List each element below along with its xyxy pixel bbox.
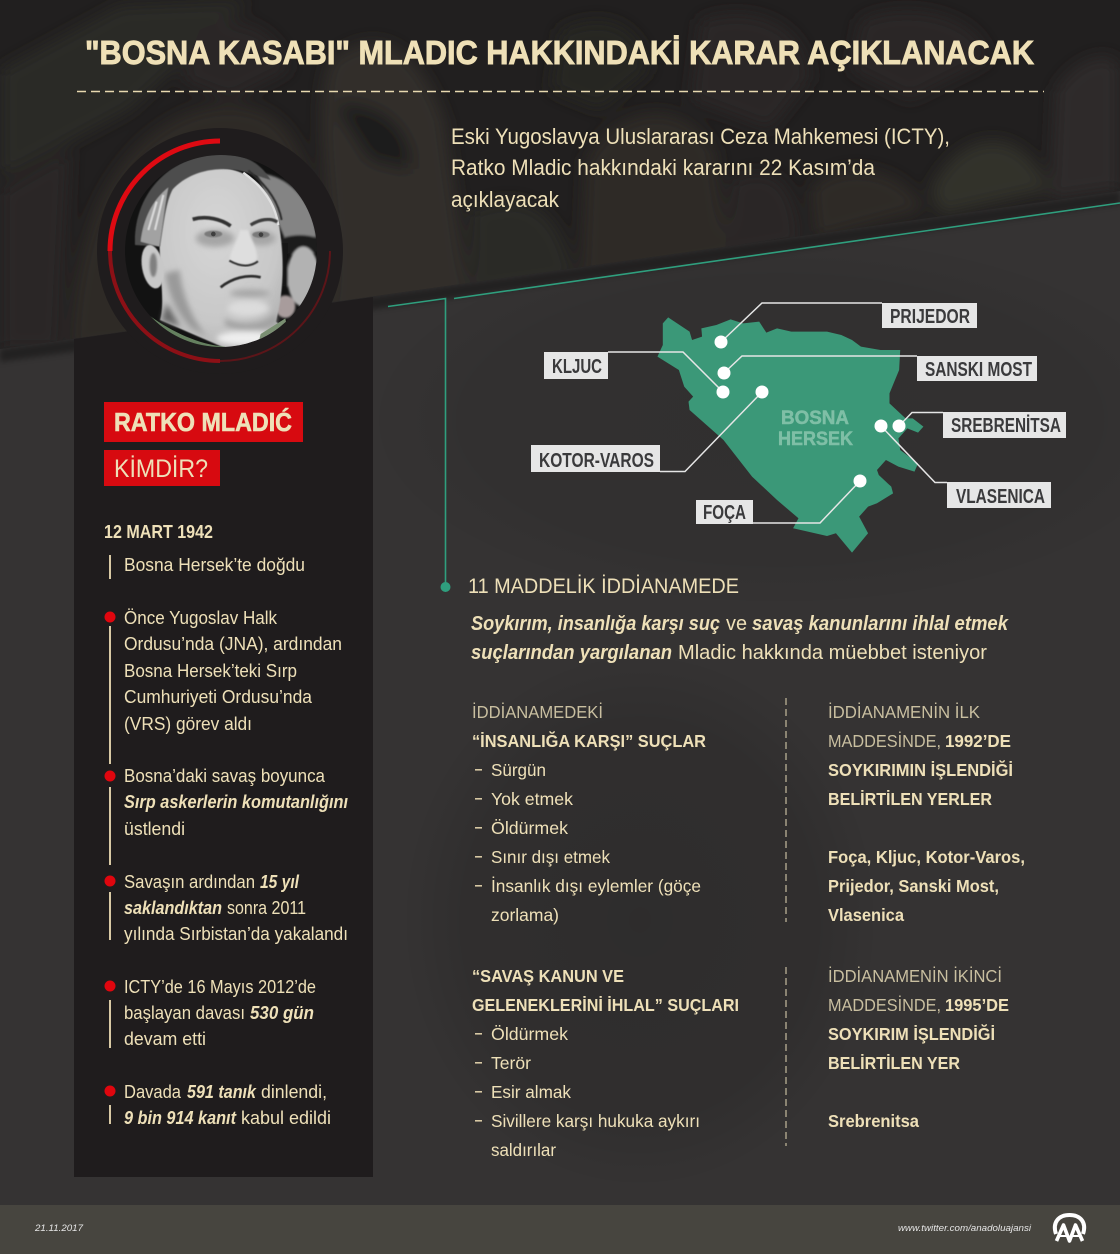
label: Sanski Most: SANSKI MOST bbox=[925, 359, 1032, 381]
intro text: Ratko Mladic hakkındaki kararını 22 Kasım’da bbox=[451, 155, 876, 180]
label: Prijedor: PRIJEDOR bbox=[890, 306, 970, 328]
map shape bbox=[657, 317, 923, 553]
entry: witnesses bbox=[104, 1082, 331, 1128]
column: crimes against humanity: zorlama) bbox=[491, 905, 559, 925]
indictment summary: savaş kanunlarını ihlal etmek bbox=[752, 613, 1009, 635]
location dots bbox=[714, 336, 906, 488]
indictment summary bbox=[471, 613, 1009, 664]
label: Vlasenica bbox=[947, 482, 1051, 508]
entry: trial bbox=[104, 977, 316, 1049]
map name: BOSNA bbox=[781, 408, 849, 429]
label: Foca: FOÇA bbox=[703, 502, 746, 524]
column: war crimes: Öldürmek bbox=[491, 1024, 568, 1044]
teal connector line bbox=[388, 203, 1120, 592]
entry: hiding: saklandıktan bbox=[124, 898, 222, 918]
date: 21.11.2017 bbox=[34, 1223, 84, 1234]
column: war crimes: “SAVAŞ KANUN VE bbox=[472, 966, 624, 986]
entry: war: Bosna’daki savaş boyunca bbox=[124, 766, 326, 786]
column: crimes against humanity: Öldürmek bbox=[491, 818, 568, 838]
intro text: açıklayacak bbox=[451, 187, 560, 212]
entry: witnesses: kabul edildi bbox=[241, 1108, 331, 1128]
column: war crimes: GELENEKLERİNİ İHLAL” SUÇLARI bbox=[472, 995, 739, 1015]
entry: hiding: sonra 2011 bbox=[227, 898, 306, 918]
column: second article location: 1995’DE bbox=[945, 995, 1009, 1015]
twitter url: www.twitter.com/anadoluajansi bbox=[898, 1223, 1032, 1234]
footer bbox=[0, 1205, 1120, 1254]
column: crimes against humanity: İDDİANAMEDEKİ bbox=[472, 702, 603, 722]
label: Vlasenica: VLASENICA bbox=[956, 486, 1045, 508]
column: war crimes: Sivillere karşı hukuka aykırı bbox=[491, 1111, 700, 1131]
label: Sanski Most bbox=[917, 356, 1037, 381]
entry: hiding: Savaşın ardından bbox=[124, 872, 255, 892]
column: second article location: MADDESİNDE, bbox=[828, 995, 941, 1015]
map name bbox=[778, 408, 853, 450]
label: Kotor-Varos bbox=[531, 445, 660, 472]
column: first article locations: BELİRTİLEN YERLER bbox=[828, 789, 992, 809]
entry: army bbox=[104, 608, 342, 764]
entry: hiding: yılında Sırbistan’da yakalandı bbox=[124, 924, 348, 944]
head bbox=[159, 167, 287, 352]
label: Srebrenitsa: SREBRENİTSA bbox=[951, 414, 1061, 437]
column: war crimes: Esir almak bbox=[491, 1082, 571, 1102]
indictment summary: Mladic hakkında müebbet isteniyor bbox=[678, 642, 987, 664]
column: second article location: Srebrenitsa bbox=[828, 1111, 919, 1131]
label: Kotor-Varos: KOTOR-VAROS bbox=[539, 450, 654, 472]
name heading: RATKO MLADIĆ bbox=[114, 407, 292, 437]
column: second article location: BELİRTİLEN YER bbox=[828, 1053, 960, 1073]
top photo background bbox=[0, 0, 1120, 360]
indictment summary: suçlarından yargılanan bbox=[471, 642, 672, 664]
title: "BOSNA KASABI" MLADIC HAKKINDAKİ KARAR AÇIKLANACAK bbox=[85, 35, 1034, 72]
column: crimes against humanity bbox=[472, 702, 706, 925]
name heading bbox=[104, 402, 303, 442]
photo bbox=[125, 155, 317, 347]
icon: AA logo bbox=[1055, 1215, 1084, 1241]
column: first article locations: Foça, Kljuc, Kotor-Varos, bbox=[828, 847, 1025, 867]
column: first article locations: 1992’DE bbox=[945, 731, 1011, 751]
column: first article locations: MADDESİNDE, bbox=[828, 731, 941, 751]
column: first article locations: SOYKIRIMIN İŞLENDİĞİ bbox=[828, 759, 1013, 780]
entry: war: üstlendi bbox=[124, 819, 185, 839]
leader lines bbox=[608, 303, 947, 523]
column: first article locations: İDDİANAMENİN İLK bbox=[828, 702, 980, 722]
intro text: Eski Yugoslavya Uluslararası Ceza Mahkemesi (ICTY), bbox=[451, 124, 950, 149]
kimdir heading: KİMDİR? bbox=[114, 454, 208, 483]
label: Kljuc bbox=[544, 352, 608, 379]
entry: witnesses: 591 tanık bbox=[187, 1082, 257, 1102]
column: crimes against humanity: Sınır dışı etmek bbox=[491, 847, 610, 867]
ring arcs bbox=[110, 141, 330, 361]
hair bbox=[135, 154, 271, 247]
entry: hiding: 15 yıl bbox=[260, 872, 300, 892]
column: war crimes: saldırılar bbox=[491, 1140, 556, 1160]
label: Srebrenitsa bbox=[943, 412, 1066, 438]
entry: witnesses: Davada bbox=[124, 1082, 182, 1102]
entry: witnesses: 9 bin 914 kanıt bbox=[124, 1108, 237, 1128]
intro text bbox=[451, 124, 950, 212]
entry: army: Önce Yugoslav Halk bbox=[124, 608, 278, 628]
entry: hiding bbox=[104, 872, 348, 944]
entry: army: Ordusu’nda (JNA), ardından bbox=[124, 634, 342, 654]
indictment summary: ve bbox=[726, 613, 747, 635]
column: crimes against humanity: Yok etmek bbox=[491, 789, 573, 809]
entry: army: (VRS) görev aldı bbox=[124, 714, 252, 734]
column: second article location bbox=[828, 966, 1009, 1131]
entry: trial: ICTY’de 16 Mayıs 2012’de bbox=[124, 977, 316, 997]
portrait bbox=[97, 128, 343, 374]
entry: birth: Bosna Hersek’te doğdu bbox=[124, 555, 305, 575]
kimdir heading bbox=[104, 450, 220, 486]
entry: army: Bosna Hersek’teki Sırp bbox=[124, 661, 297, 681]
entry: war: Sırp askerlerin komutanlığını bbox=[124, 792, 348, 812]
map name: HERSEK bbox=[778, 429, 853, 450]
map: Bosna Hersek bbox=[531, 303, 1066, 553]
indictment summary: Soykırım, insanlığa karşı suç bbox=[471, 613, 720, 635]
column: crimes against humanity: Sürgün bbox=[491, 760, 546, 780]
column: first article locations bbox=[828, 702, 1025, 925]
column: first article locations: Prijedor, Sanski Most, bbox=[828, 876, 999, 896]
label: Kljuc: KLJUC bbox=[552, 356, 602, 378]
column: crimes against humanity: “İNSANLIĞA KARŞI” SUÇLAR bbox=[472, 730, 706, 751]
column: second article location: SOYKIRIM İŞLENDİĞİ bbox=[828, 1023, 995, 1044]
entry: war bbox=[104, 766, 348, 865]
entry: trial: devam etti bbox=[124, 1029, 206, 1049]
entry: trial: 530 gün bbox=[250, 1003, 314, 1023]
column: first article locations: Vlasenica bbox=[828, 905, 904, 925]
column: crimes against humanity: İnsanlık dışı eylemler (göçe bbox=[491, 876, 701, 896]
entry: trial: başlayan davası bbox=[124, 1003, 245, 1023]
column: second article location: İDDİANAMENİN İKİNCİ bbox=[828, 966, 1002, 986]
column: war crimes bbox=[472, 966, 739, 1160]
ear bbox=[140, 244, 162, 290]
sidebar panel bbox=[74, 297, 373, 1177]
entry: witnesses: dinlendi, bbox=[261, 1082, 327, 1102]
biography timeline bbox=[104, 522, 348, 1128]
indictment heading: 11 MADDELİK İDDİANAMEDE bbox=[468, 574, 739, 598]
birth date: 12 MART 1942 bbox=[104, 522, 213, 542]
column: war crimes: Terör bbox=[491, 1053, 531, 1073]
entry: army: Cumhuriyeti Ordusu’nda bbox=[124, 687, 313, 707]
